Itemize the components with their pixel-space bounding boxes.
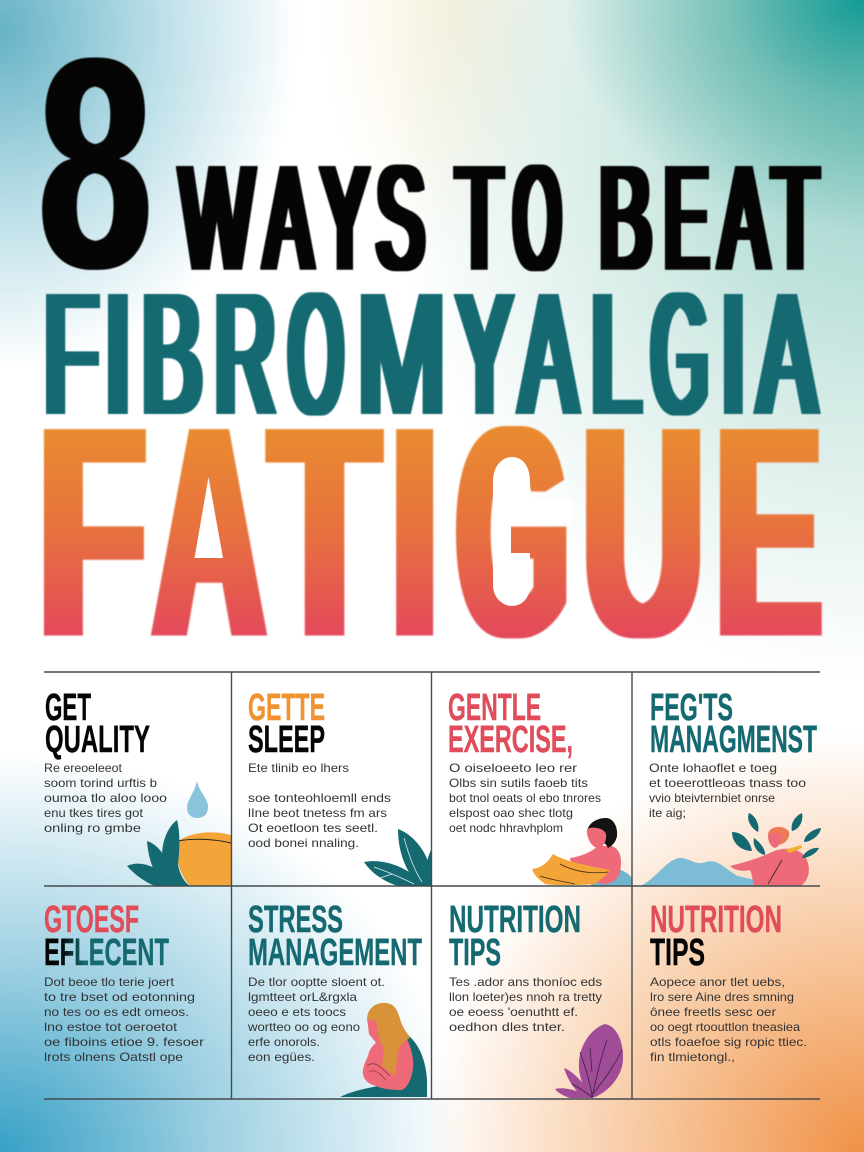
title: ways to beat: Y: [322, 136, 368, 301]
body text: oeeo e ets toocs: [248, 1005, 346, 1019]
body text: oumoa tlo aloo looo: [44, 791, 167, 805]
body text: lno estoe tot oeroetot: [44, 1020, 178, 1034]
body text: wortteo oo og eono: [247, 1020, 360, 1034]
title: fatigue: E: [717, 363, 821, 699]
title: ways to beat: O: [514, 135, 560, 300]
title: fibromyalgia: L: [591, 258, 641, 451]
title: ways to beat: T: [772, 135, 818, 300]
body text: [649, 761, 806, 820]
illustration: hills: [640, 858, 755, 886]
title: ways to beat: W: [181, 134, 253, 300]
title: ways to beat: [181, 134, 818, 301]
body text: [44, 761, 167, 835]
body text: Dot beoe tlo terie joert: [44, 975, 175, 989]
title: ways to beat: S: [377, 135, 424, 301]
title: ways to beat: T: [456, 135, 502, 300]
body text: bot tnol oeats ol ebo tnrores: [449, 791, 601, 805]
heading: [449, 899, 581, 974]
panel 3: gentle exercise: [448, 687, 632, 886]
heading: GET: [45, 687, 91, 729]
title: fibromyalgia: [44, 257, 815, 451]
title: fatigue: F: [39, 364, 145, 699]
heading: MANAGEMENT: [248, 932, 422, 974]
icon: leaves: [364, 829, 431, 886]
panel 1: get quality: [44, 687, 231, 886]
title: fibromyalgia: R: [215, 257, 275, 450]
body text: [248, 761, 391, 850]
body text: lrots olnens Oatstl ope: [44, 1050, 183, 1064]
body text: Tes .ador ans thoníoc eds: [449, 975, 602, 989]
heading: GETTE: [248, 687, 325, 729]
title: fatigue: [39, 363, 821, 700]
body text: soe tonteohloemll ends: [248, 791, 391, 805]
body text: Re ereoeleeot: [44, 761, 123, 775]
body text: onling ro gmbe: [44, 821, 141, 835]
title: ways to beat: E: [665, 136, 708, 301]
body text: [44, 975, 204, 1064]
body text: [650, 975, 807, 1064]
title: fibromyalgia: A: [758, 257, 815, 450]
title: fibromyalgia: G: [652, 258, 708, 451]
icon: water drop: [187, 781, 208, 818]
body text: oe fiboins etioe 9. fesoer: [44, 1035, 204, 1049]
body text: De tlor ooptte sloent ot.: [248, 975, 385, 989]
body text: Ete tlinib eo lhers: [248, 761, 349, 775]
illustration: woman with blanket: [532, 818, 632, 886]
body text: oe eoess 'oenuthtt ef.: [449, 1005, 578, 1019]
heading: EXERCISE,: [448, 719, 573, 761]
body text: otls foaefoe sig ropic ttiec.: [650, 1035, 807, 1049]
illustration: woman holding chest: [340, 1003, 427, 1097]
panel 6: stress management: [247, 899, 427, 1097]
icon: pot and leaves: [127, 820, 231, 886]
body text: enu tkes tires got: [44, 806, 144, 820]
body text: et toeerottleoas tnass too: [649, 776, 806, 790]
title: fibromyalgia: I: [722, 257, 745, 450]
title: [39, 0, 821, 700]
body text: soom torind urftis b: [44, 776, 157, 790]
title: ways to beat: A: [265, 135, 312, 301]
body text: [449, 975, 602, 1034]
heading: STRESS: [248, 899, 343, 941]
heading: GENTLE: [448, 687, 541, 729]
panel 4: managment: [640, 687, 821, 886]
title: fibromyalgia: A: [520, 257, 577, 450]
heading: [650, 899, 782, 974]
title: fibromyalgia: M: [358, 258, 446, 451]
title: numeral 8: 8: [39, 0, 152, 331]
heading: [45, 687, 150, 761]
panel 2: gette sleep: [248, 687, 431, 886]
body text: oedhon dles tnter.: [449, 1020, 565, 1034]
heading: TIPS: [650, 932, 705, 974]
body text: lgmtteet orL&rgxla: [248, 990, 357, 1004]
heading: GTOESF: [44, 899, 139, 941]
heading: EFLECENT: [44, 932, 169, 974]
body text: Aopece anor tlet uebs,: [650, 975, 785, 989]
body text: Onte lohaoflet e toeg: [649, 761, 777, 775]
panel 5: gtoesf eflecent: [44, 899, 204, 1064]
body text: lro sere Aine dres smning: [650, 990, 794, 1004]
title: fatigue: U: [583, 365, 703, 700]
icon: purple plant: [555, 1024, 623, 1098]
title: fatigue: I: [392, 363, 437, 699]
body text: Olbs sin sutils faoeb tits: [449, 776, 588, 790]
title: fatigue: A: [154, 366, 264, 700]
title: fibromyalgia: I: [105, 257, 131, 451]
heading: [248, 899, 422, 974]
panel 7: nutrition tips: [449, 899, 623, 1098]
body text: ite aig;: [649, 806, 686, 820]
body text: [449, 761, 601, 835]
body text: oet nodc hhravhplom: [449, 821, 563, 835]
body text: elspost oao shec tlotg: [449, 806, 573, 820]
body text: eon egües.: [248, 1050, 315, 1064]
title: ways to beat: B: [599, 136, 652, 301]
body text: Ot eoetloon tes seetl.: [248, 821, 378, 835]
heading: [448, 687, 573, 761]
heading: QUALITY: [45, 719, 150, 761]
body text: vvio bteivternbiet onrse: [649, 791, 775, 805]
body text: no tes oo es edt omeos.: [44, 1005, 189, 1019]
heading: [248, 687, 325, 761]
body text: oo oegt rtoouttlon tneasiea: [650, 1020, 800, 1034]
body text: llon loeter)es nnoh ra tretty: [449, 990, 602, 1004]
title: fatigue: T: [270, 365, 379, 700]
panel 8: nutrition tips: [650, 899, 807, 1064]
title: fibromyalgia: B: [142, 258, 202, 451]
title: fatigue: G: [457, 364, 568, 699]
body text: [247, 975, 385, 1064]
title: fibromyalgia: O: [289, 257, 343, 450]
title: ways to beat: A: [720, 135, 768, 301]
heading: SLEEP: [248, 719, 325, 761]
heading: [44, 899, 169, 974]
heading: FEG'TS: [650, 687, 733, 729]
illustration: person with leaves: [730, 813, 821, 886]
heading: TIPS: [449, 932, 501, 974]
body text: ônee freetls sesc oer: [650, 1005, 776, 1019]
heading: NUTRITION: [449, 899, 581, 941]
title: fibromyalgia: Y: [457, 257, 512, 451]
body text: O oiseloeeto leo rer: [449, 761, 577, 775]
body text: erfe onorols.: [248, 1035, 320, 1049]
heading: NUTRITION: [650, 899, 782, 941]
body text: to tre bset od eotonning: [44, 990, 195, 1004]
body text: lIne beot tnetess fm ars: [248, 806, 387, 820]
title: fibromyalgia: F: [44, 258, 98, 451]
heading: [650, 687, 817, 761]
body text: ood bonei nnaling.: [248, 836, 359, 850]
body text: fin tlmietongl.,: [650, 1050, 735, 1064]
